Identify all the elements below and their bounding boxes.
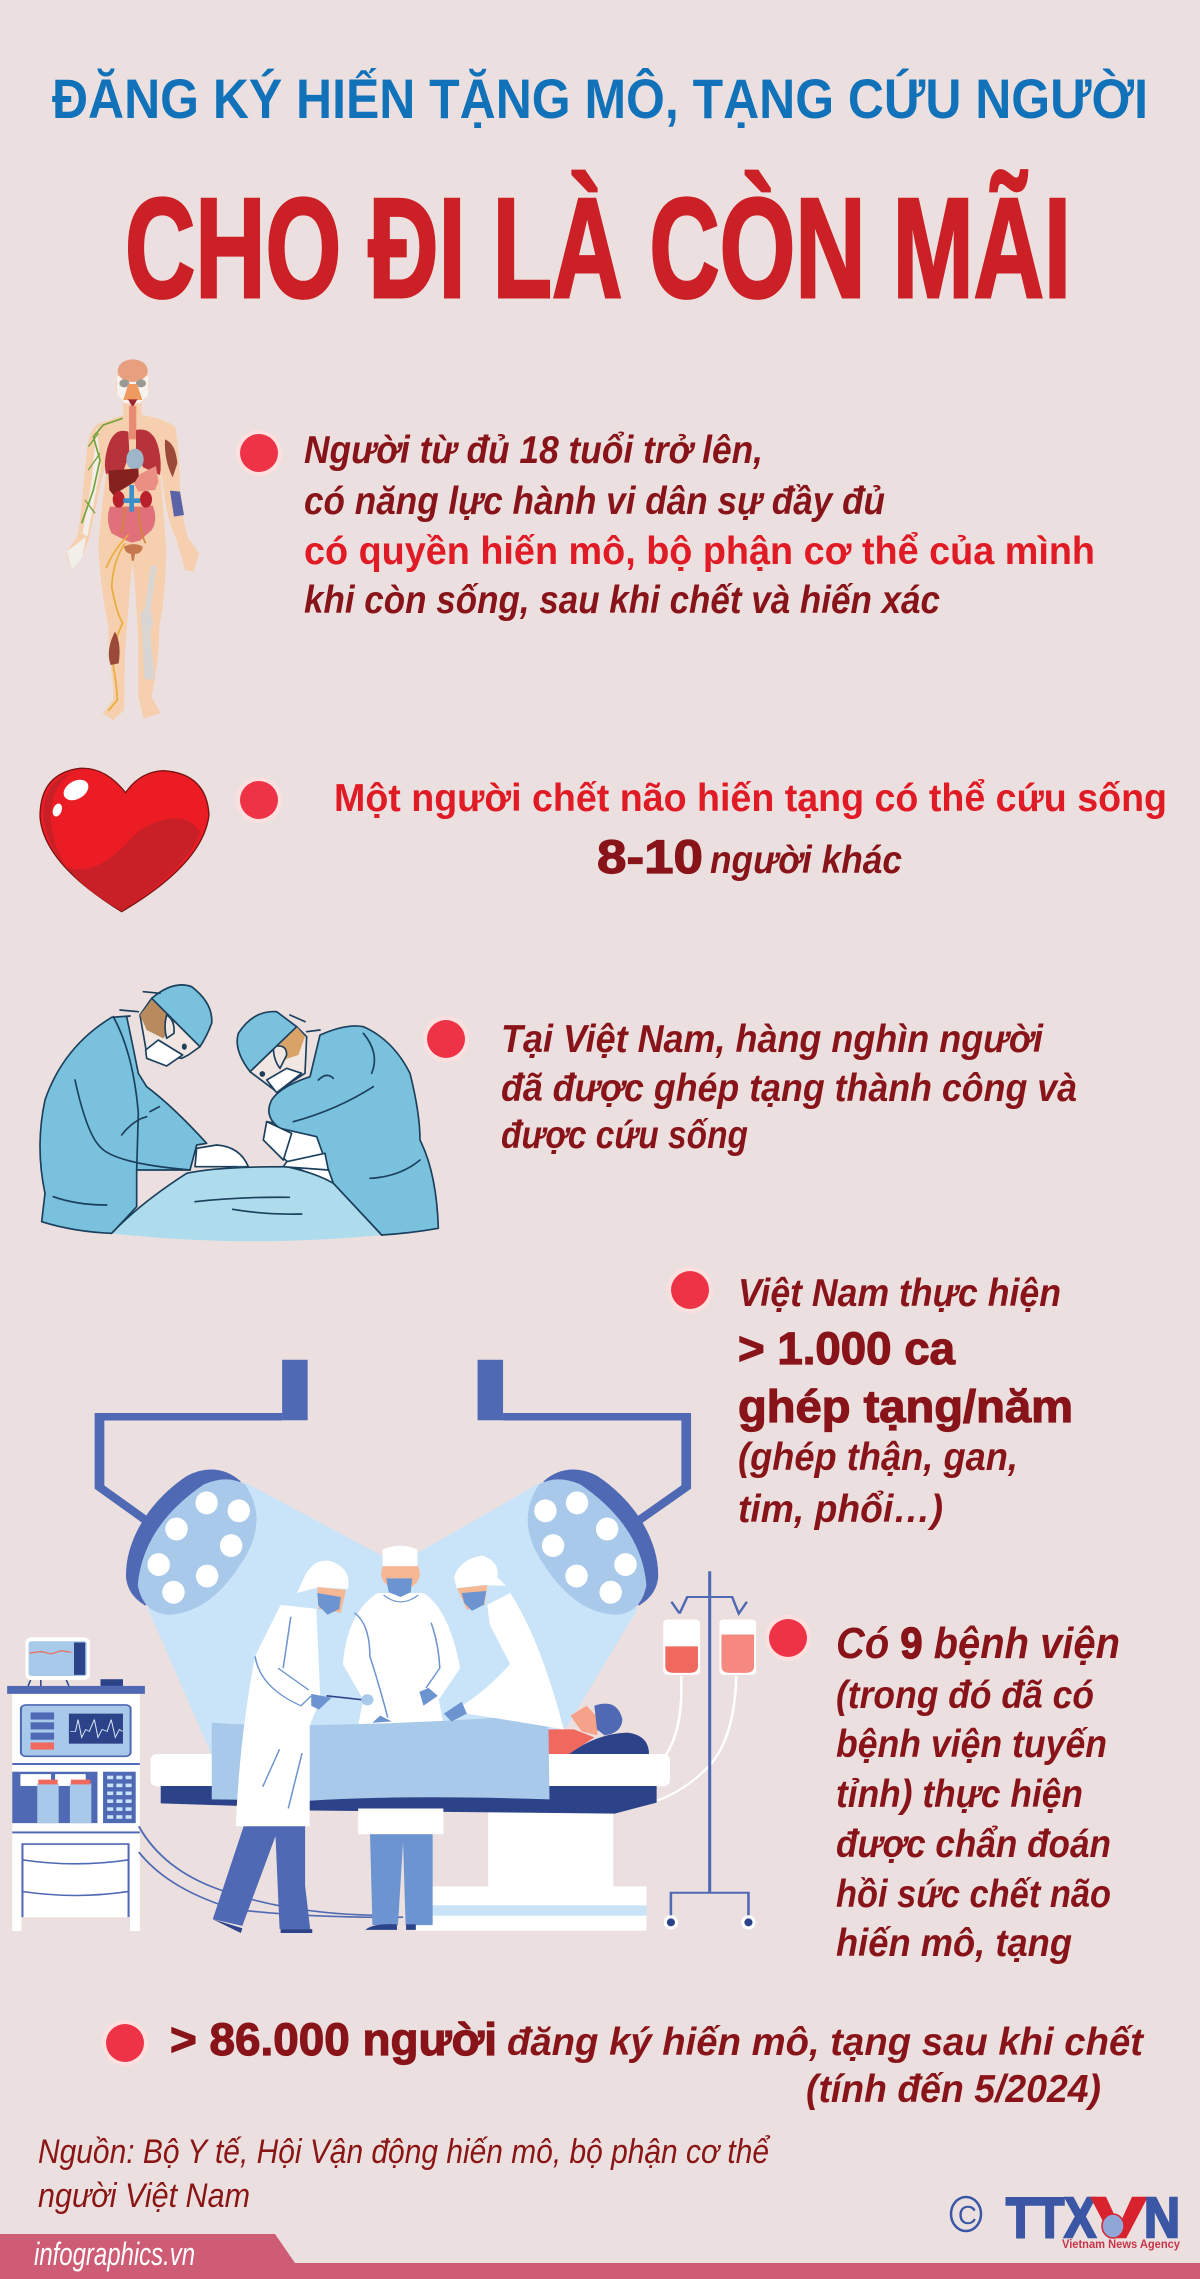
lungs bbox=[105, 430, 161, 475]
cables bbox=[139, 1826, 403, 1917]
copyright mark: C bbox=[958, 2200, 977, 2230]
patient drape bbox=[112, 1122, 382, 1241]
text block: nine hospitals: tỉnh) thực hiện bbox=[836, 1773, 1083, 1816]
text block: registered donors: > 86.000 người bbox=[170, 2014, 497, 2065]
middle surgeon bbox=[343, 1546, 460, 1930]
text block: transplants per year: > 1.000 ca bbox=[738, 1323, 956, 1374]
bullet 4 bbox=[667, 1267, 713, 1313]
text block: transplants per year: tim, phổi…) bbox=[738, 1488, 943, 1531]
agency letters: N bbox=[1144, 2186, 1180, 2250]
muscles bbox=[109, 439, 177, 665]
agency letters: TTX bbox=[1006, 2186, 1096, 2250]
nerves yellow bbox=[106, 535, 128, 711]
text block: eligibility: có quyền hiến mô, bộ phận cơ thể của mình bbox=[304, 530, 1095, 573]
agency tagline: Vietnam News Agency bbox=[1062, 2237, 1180, 2251]
text block: transplants in Vietnam bbox=[501, 1018, 1077, 1157]
liver and stomach bbox=[108, 466, 158, 495]
source note: người Việt Nam bbox=[38, 2177, 250, 2215]
text block: transplants in Vietnam: Tại Việt Nam, hàng nghìn người bbox=[501, 1018, 1044, 1061]
light beam cones bbox=[148, 1482, 638, 1755]
bullet 3 bbox=[423, 1016, 469, 1062]
head and skull bbox=[116, 359, 149, 407]
footer band bbox=[0, 2234, 1200, 2279]
copyright mark bbox=[951, 2197, 981, 2231]
text block: eligibility: có năng lực hành vi dân sự đầy đủ bbox=[304, 480, 885, 523]
trachea bbox=[129, 406, 136, 439]
text block: transplants per year: ghép tạng/năm bbox=[738, 1381, 1073, 1432]
text block: registered donors bbox=[170, 2014, 1145, 2111]
nerves green and arm bones bbox=[67, 418, 123, 570]
text block: brain death donor: Một người chết não hiến tạng có thể cứu sống bbox=[334, 777, 1167, 820]
text block: nine hospitals: bệnh viện tuyến bbox=[836, 1723, 1107, 1766]
left surgeon bbox=[40, 985, 248, 1233]
icon: heart bbox=[40, 768, 209, 912]
right surgeon bbox=[237, 1012, 438, 1235]
text block: nine hospitals: được chẩn đoán bbox=[836, 1823, 1111, 1866]
heart organ bbox=[126, 449, 144, 470]
text block: nine hospitals: hiến mô, tạng bbox=[836, 1922, 1072, 1965]
surgical drape bbox=[212, 1718, 549, 1801]
operating table bbox=[151, 1754, 670, 1931]
IV stand and blood bags bbox=[657, 1571, 756, 1929]
text block: registered donors: đăng ký hiến mô, tạng sau khi chết bbox=[507, 2021, 1145, 2064]
text block: registered donors: (tính đến 5/2024) bbox=[806, 2068, 1101, 2111]
text block: brain death donor bbox=[334, 777, 1167, 883]
text block: nine hospitals: (trong đó đã có bbox=[836, 1674, 1094, 1717]
source note: Nguồn: Bộ Y tế, Hội Vận động hiến mô, bộ phận cơ thể bbox=[38, 2133, 771, 2171]
text block: eligibility bbox=[304, 429, 1095, 622]
bullet 2 bbox=[236, 777, 282, 823]
logo: TTXVN bbox=[951, 2186, 1180, 2251]
right ceiling lamp bbox=[478, 1360, 686, 1615]
text block: nine hospitals: Có 9 bệnh viện bbox=[836, 1619, 1120, 1668]
text block: nine hospitals: hồi sức chết não bbox=[836, 1873, 1111, 1916]
text block: transplants per year bbox=[738, 1272, 1073, 1531]
globe bbox=[1102, 2214, 1124, 2238]
left surgeon bbox=[213, 1561, 373, 1933]
bullet 1 bbox=[236, 430, 282, 476]
agency letters: V bbox=[1092, 2186, 1146, 2250]
icon: human body anatomy bbox=[66, 359, 199, 720]
leg bones bbox=[140, 566, 157, 679]
text block: brain death donor: 8-10 bbox=[597, 830, 703, 883]
left ceiling lamp bbox=[99, 1360, 308, 1615]
vital signs monitor bbox=[26, 1637, 123, 1686]
vessels arm bbox=[170, 491, 184, 517]
right surgeon bbox=[444, 1555, 564, 1729]
text block: eligibility: khi còn sống, sau khi chết và hiến xác bbox=[304, 579, 940, 622]
source note bbox=[38, 2133, 771, 2215]
footer site name: infographics.vn bbox=[34, 2236, 195, 2272]
bladder bbox=[124, 544, 143, 561]
text block: transplants in Vietnam: đã được ghép tạng thành công và bbox=[501, 1067, 1077, 1110]
patient bbox=[548, 1704, 649, 1754]
bullet 6 bbox=[102, 2020, 148, 2066]
text block: eligibility: Người từ đủ 18 tuổi trở lên, bbox=[304, 429, 763, 472]
illustration: operating room bbox=[7, 1360, 756, 1933]
agency letters bbox=[1006, 2186, 1180, 2250]
text block: transplants per year: Việt Nam thực hiện bbox=[738, 1272, 1061, 1315]
text block: nine hospitals bbox=[836, 1619, 1120, 1965]
text block: transplants in Vietnam: được cứu sống bbox=[501, 1114, 748, 1157]
bullet 5 bbox=[765, 1615, 811, 1661]
medical cart bbox=[7, 1686, 145, 1931]
illustration: two surgeons bbox=[40, 985, 438, 1241]
text block: transplants per year: (ghép thận, gan, bbox=[738, 1436, 1018, 1479]
kidneys and vessels bbox=[108, 485, 155, 543]
text block: brain death donor: người khác bbox=[710, 839, 902, 882]
